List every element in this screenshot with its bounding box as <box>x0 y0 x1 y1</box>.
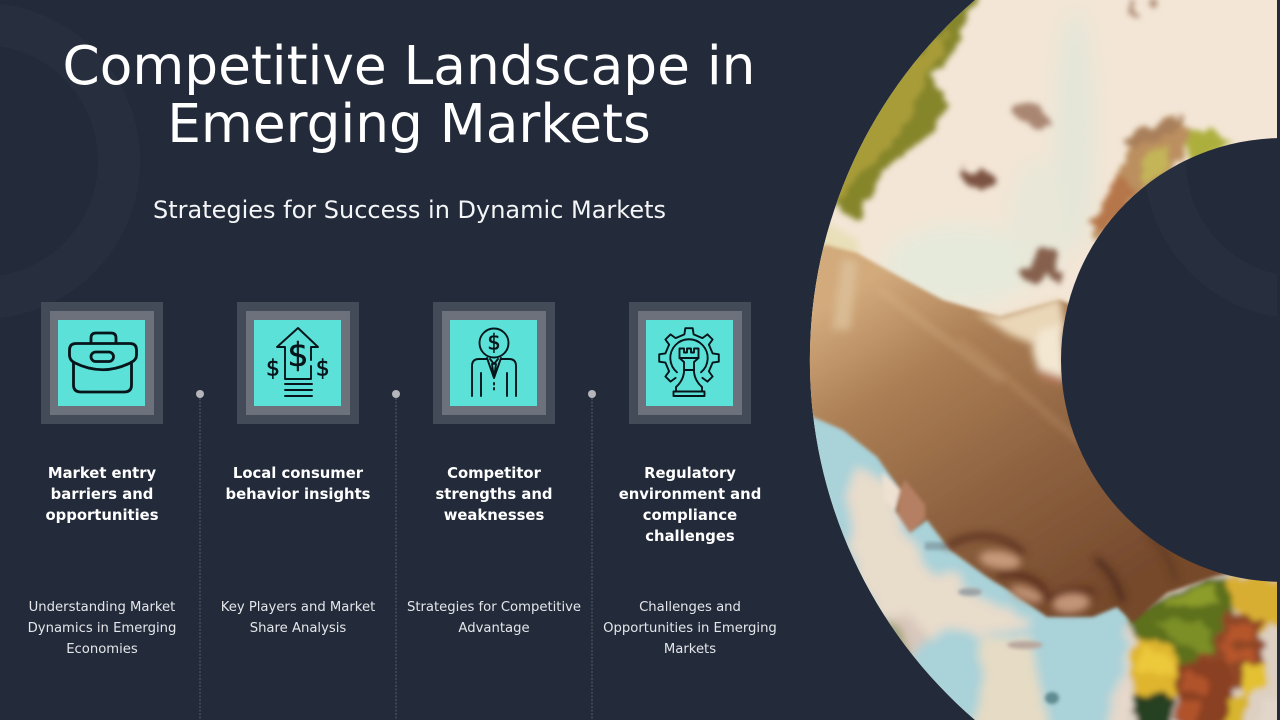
description <box>28 600 176 657</box>
title: Emerging Markets <box>167 92 651 154</box>
map labels on sea <box>925 542 1059 704</box>
panel: regulatory <box>603 302 777 657</box>
heading: Regulatory <box>644 465 736 482</box>
description: Economies <box>66 642 138 657</box>
heading: Competitor <box>447 465 541 482</box>
description: Share Analysis <box>250 621 346 636</box>
panel: market entry <box>28 302 176 657</box>
decorative ring left <box>0 24 119 298</box>
heading: behavior insights <box>226 486 370 503</box>
description: Understanding Market <box>29 600 175 615</box>
heading: Local consumer <box>233 465 363 482</box>
description: Markets <box>664 642 716 657</box>
heading: compliance <box>643 507 737 524</box>
description <box>603 600 777 657</box>
icon: briefcase <box>41 302 163 424</box>
icon: dollar arrow: $ <box>315 356 329 382</box>
heading: barriers and <box>51 486 153 503</box>
heading: challenges <box>645 528 735 545</box>
subtitle: Strategies for Success in Dynamic Markets <box>153 196 666 224</box>
description: Dynamics in Emerging <box>28 621 176 636</box>
title: Competitive Landscape in <box>63 34 755 96</box>
hand details <box>914 316 1178 604</box>
icon: gear with chess rook <box>629 302 751 424</box>
heading <box>619 465 761 545</box>
heading: opportunities <box>45 507 158 524</box>
description: Opportunities in Emerging <box>603 621 777 636</box>
panel: consumer insights <box>221 302 375 636</box>
panel: competitor <box>407 302 581 636</box>
connector 2 <box>392 390 400 718</box>
cuff <box>811 222 861 325</box>
heading: Market entry <box>48 465 156 482</box>
hand highlights <box>832 258 1066 385</box>
icon: businessman with dollar head: $ <box>487 330 500 354</box>
inner circle cut-out with decorative ring <box>1061 138 1277 582</box>
description: Advantage <box>458 621 530 636</box>
title <box>63 34 755 154</box>
hand <box>810 244 1230 624</box>
description <box>407 600 581 636</box>
icon: dollar arrow: $ <box>287 335 308 374</box>
heading: environment and <box>619 486 761 503</box>
description: Strategies for Competitive <box>407 600 581 615</box>
icon: businessman with dollar head <box>433 302 555 424</box>
icon: dollar arrow: $ <box>266 356 280 382</box>
description <box>221 600 375 636</box>
heading: strengths and <box>435 486 553 503</box>
sea below the hand <box>812 402 1135 720</box>
description: Challenges and <box>639 600 741 615</box>
heading <box>435 465 553 524</box>
heading <box>226 465 370 503</box>
photo: map and handshake <box>780 0 1280 720</box>
icon: dollar arrow <box>237 302 359 424</box>
heading: weaknesses <box>444 507 544 524</box>
heading <box>45 465 158 524</box>
connector 1 <box>196 390 204 718</box>
description: Key Players and Market <box>221 600 375 615</box>
africa map colours <box>1130 570 1280 720</box>
connector 3 <box>588 390 596 718</box>
